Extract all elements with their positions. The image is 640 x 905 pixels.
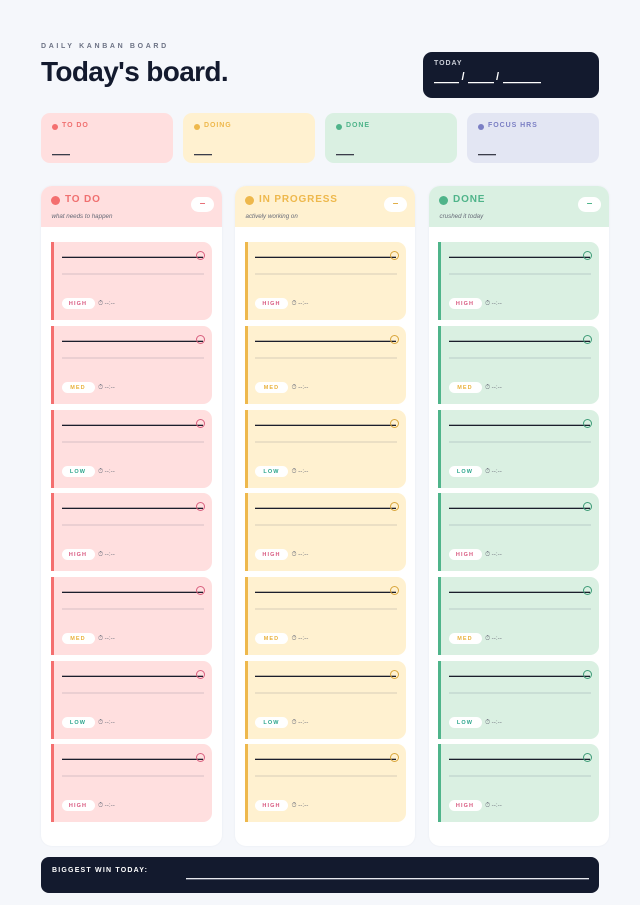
stat: done <box>325 113 457 163</box>
task card: MED <box>264 385 279 391</box>
stat: to do <box>41 113 173 163</box>
task card: ⏱ --:-- <box>292 468 308 474</box>
footer: biggest win <box>41 857 599 893</box>
task card: LOW <box>263 469 280 475</box>
task card <box>244 661 406 739</box>
task card: ⏱ --:-- <box>98 468 115 474</box>
column header: to do <box>41 186 222 227</box>
stat: to do: TO DO <box>62 122 89 129</box>
column header: done <box>429 186 609 227</box>
task card <box>244 744 406 822</box>
task card: ⏱ --:-- <box>485 634 502 642</box>
task card: HIGH <box>456 803 474 809</box>
task card: ⏱ --:-- <box>485 384 502 390</box>
task card <box>244 577 406 655</box>
task card: HIGH <box>262 552 281 558</box>
column header: to do: TO DO <box>65 194 101 205</box>
task card: ⏱ --:-- <box>98 802 115 808</box>
task card: LOW <box>70 720 86 726</box>
task card <box>51 577 212 655</box>
task card: ⏱ --:-- <box>485 300 502 306</box>
task card: HIGH <box>262 301 281 307</box>
task card: LOW <box>263 720 280 726</box>
task card: HIGH <box>456 552 474 558</box>
task card <box>244 242 406 320</box>
task card: MED <box>457 636 473 642</box>
task card: HIGH <box>69 301 87 307</box>
column header: done: – <box>587 198 592 209</box>
task card: ⏱ --:-- <box>98 550 115 558</box>
column header: in progress <box>235 186 415 227</box>
task card: MED <box>264 636 279 642</box>
task card: LOW <box>457 469 473 475</box>
task card: ⏱ --:-- <box>292 718 308 726</box>
task card: ⏱ --:-- <box>292 634 308 642</box>
task card <box>438 410 599 488</box>
task card <box>244 493 406 571</box>
task card <box>51 326 212 404</box>
date panel: / <box>496 71 499 83</box>
column header: to do: what needs to happen <box>52 213 112 220</box>
task card: ⏱ --:-- <box>485 550 502 558</box>
task card: ⏱ --:-- <box>98 634 115 642</box>
task card: ⏱ --:-- <box>292 802 308 808</box>
stat: focus hours: FOCUS HRS <box>488 122 538 129</box>
column header: in progress: IN PROGRESS <box>259 194 338 205</box>
stat: doing: DOING <box>204 122 232 129</box>
task card <box>244 326 406 404</box>
stat: doing <box>183 113 315 163</box>
task card: HIGH <box>69 552 87 558</box>
task card: ⏱ --:-- <box>98 718 115 726</box>
footer: biggest win: BIGGEST WIN TODAY: <box>52 867 148 874</box>
task card: MED <box>70 385 86 391</box>
task card: HIGH <box>262 803 281 809</box>
panel: done column <box>429 186 609 846</box>
task card: ⏱ --:-- <box>98 300 115 306</box>
task card: LOW <box>70 469 86 475</box>
task card <box>438 493 599 571</box>
task card: ⏱ --:-- <box>485 802 502 808</box>
task card <box>51 410 212 488</box>
task card: ⏱ --:-- <box>292 300 308 306</box>
task card: HIGH <box>69 803 87 809</box>
date panel: TODAY <box>434 60 462 67</box>
column header: done: crushed it today <box>440 213 483 220</box>
eyebrow label: DAILY KANBAN BOARD <box>41 43 169 50</box>
task card: ⏱ --:-- <box>485 468 502 474</box>
task card <box>244 410 406 488</box>
column header: in progress: actively working on <box>246 213 298 220</box>
title: Today's board. <box>41 56 228 87</box>
panel: to do column <box>41 186 222 846</box>
task card <box>438 577 599 655</box>
task card <box>51 493 212 571</box>
stat: done: DONE <box>346 122 370 129</box>
task card: MED <box>70 636 86 642</box>
task card <box>51 744 212 822</box>
task card: LOW <box>457 720 473 726</box>
task card: MED <box>457 385 473 391</box>
panel: in progress column <box>235 186 415 846</box>
task card <box>438 661 599 739</box>
task card <box>51 661 212 739</box>
column header: done: DONE <box>453 194 485 205</box>
task card <box>51 242 212 320</box>
task card: HIGH <box>456 301 474 307</box>
task card: ⏱ --:-- <box>292 550 308 558</box>
date panel: / <box>462 71 465 83</box>
task card <box>438 326 599 404</box>
task card: ⏱ --:-- <box>292 384 308 390</box>
task card: ⏱ --:-- <box>485 718 502 726</box>
date panel <box>423 52 599 98</box>
task card <box>438 744 599 822</box>
column header: in progress: – <box>393 198 398 209</box>
task card: ⏱ --:-- <box>98 384 115 390</box>
task card <box>438 242 599 320</box>
column header: to do: – <box>200 198 205 209</box>
stat: focus hours <box>467 113 599 163</box>
